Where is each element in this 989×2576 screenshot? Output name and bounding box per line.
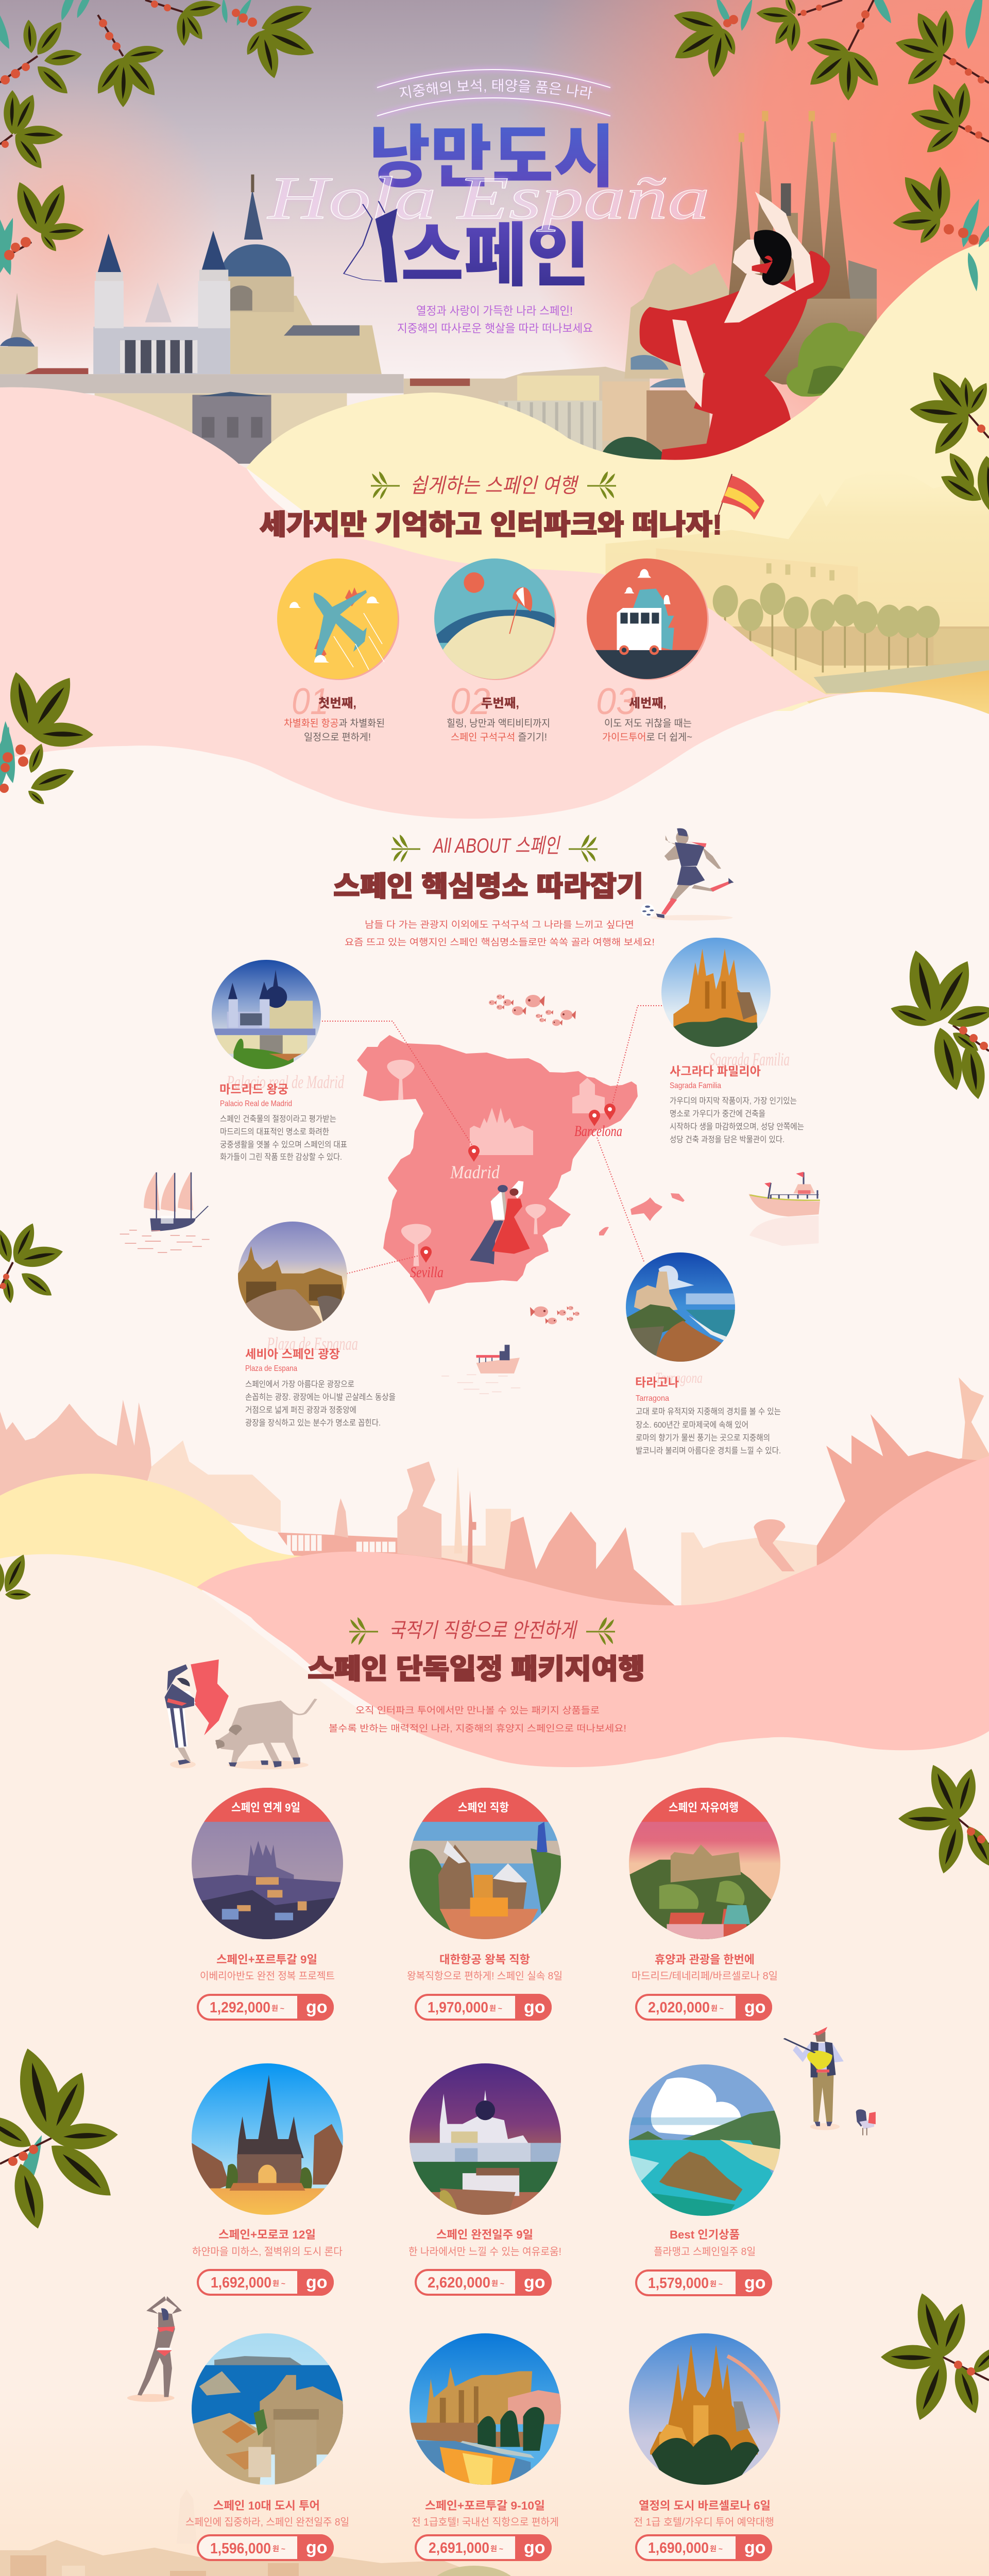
price button: 1,292,000 (210, 1999, 270, 2016)
description: 로마의 향기가 물씬 풍기는 곳으로 지중해의 (636, 1433, 770, 1443)
tour subtitle: 한 나라에서만 느낄 수 있는 여유로움! (408, 2246, 561, 2258)
hero tagline: 지중해의 보석, 태양을 품은 나라 (399, 78, 592, 100)
price button: 1,579,000 (648, 2275, 709, 2292)
step 2 caption: 스페인 구석구석 즐기기! (451, 732, 547, 743)
category label: 스페인 직항 (458, 1801, 509, 1814)
tour card 7 (185, 2333, 349, 2561)
tour card 3 (629, 1788, 780, 2021)
hero title line 1: 낭만도시 (369, 120, 615, 195)
lower right wave mask (773, 692, 989, 804)
price button (198, 2534, 334, 2561)
price button (636, 2269, 772, 2296)
hand-lettered heading with sprigs (371, 471, 616, 499)
price button: go (306, 1997, 328, 2017)
photo: Park Guell with label (410, 1788, 561, 1939)
illustration: dancing couple (470, 1181, 530, 1264)
price button: 2,620,000 (428, 2275, 490, 2291)
tour card 5 (408, 2063, 561, 2296)
section title: 세가지만 기억하고 인터파크와 떠나자! (260, 510, 722, 540)
photo: palace (212, 960, 321, 1069)
map landmark: tower (572, 1078, 605, 1113)
photo: coast (626, 1252, 735, 1362)
icon: Spanish flag (718, 474, 764, 520)
price button: 원 ~ (490, 2545, 503, 2553)
hero title line 2: 스페인 (401, 217, 590, 295)
hero sky gradient (0, 0, 989, 469)
icon: parasol (509, 587, 532, 634)
tour card 8 (410, 2333, 561, 2561)
illustration: soccer player (641, 828, 734, 921)
left foliage mid page (0, 2044, 121, 2232)
circle 3: guide bus (587, 558, 709, 680)
cream wave (246, 241, 989, 711)
place card: Tarragona (626, 1252, 781, 1455)
tour subtitle: 플라맹고 스페인일주 8일 (654, 2246, 756, 2258)
tour title: 스페인 완전일주 9일 (436, 2228, 533, 2241)
place name: 사그라다 파밀리아 (670, 1064, 761, 1078)
hero tagline arcs (377, 70, 610, 116)
section title: 스페인 단독일정 패키지여행 (308, 1654, 645, 1685)
tour card 9 (629, 2333, 780, 2561)
description: 명소로 가우디가 중간에 건축을 (670, 1109, 765, 1118)
price button (416, 2269, 552, 2296)
script label: Palacio real de Madrid (226, 1072, 345, 1092)
hero subtitle: 지중해의 따사로운 햇살을 따라 떠나보세요 (397, 322, 593, 335)
price button: 1,596,000 (210, 2540, 271, 2557)
lower-right foliage on cream (909, 366, 989, 513)
icon: airplane (289, 587, 384, 670)
yellow wave (0, 1473, 309, 1592)
step 2 caption: 힐링, 낭만과 액티비티까지 (447, 718, 550, 729)
price button (198, 1994, 334, 2021)
tour subtitle: 전 1급호텔! 국내선 직항으로 편하게 (412, 2516, 559, 2528)
tour title: 스페인+모로코 12일 (218, 2228, 316, 2241)
description: 스페인에서 가장 아름다운 광장으로 (245, 1380, 354, 1389)
section description: 요즘 뜨고 있는 여행지인 스페인 핵심명소들로만 쏙쏙 골라 여행해 보세요! (345, 937, 655, 947)
place name: 마드리드 왕궁 (219, 1082, 288, 1096)
price button: 2,020,000 (648, 1999, 710, 2016)
tour subtitle: 스페인에 집중하라, 스페인 완전일주 8일 (185, 2516, 349, 2528)
script overlay Hola Espana: Hola España (266, 164, 710, 232)
photo: Tossa de Mar (192, 2333, 343, 2485)
icon: bus (617, 608, 661, 655)
photo: pink sky hill castle with label (629, 1788, 780, 1939)
price button: go (524, 1997, 545, 2017)
tour title: 스페인+포르투갈 9일 (216, 1953, 317, 1966)
description: 마드리드의 대표적인 명소로 화려한 (220, 1127, 329, 1137)
price button: 원 ~ (711, 2004, 724, 2012)
price button: 원 ~ (272, 2279, 285, 2287)
left foliage at section change (0, 669, 93, 807)
description: 시작하다 생을 마감하였으며, 성당 안쪽에는 (670, 1122, 804, 1131)
price button: 원 ~ (710, 2280, 723, 2288)
map trees (387, 1060, 546, 1266)
description: 광장을 장식하고 있는 분수가 명소로 꼽힌다. (245, 1418, 381, 1428)
description (636, 1407, 781, 1455)
step 2 caption (447, 681, 550, 743)
description: 화가들이 그린 작품 또한 감상할 수 있다. (220, 1153, 342, 1162)
photo: Palma cathedral background (606, 468, 989, 714)
script label: Tarragona (655, 1369, 703, 1386)
illustration: swimmer (127, 2296, 182, 2402)
place name: 세비아 스페인 광장 (245, 1347, 340, 1361)
price button: 원 ~ (491, 2279, 504, 2287)
map of Spain (120, 1006, 820, 1394)
description: 성당 건축 과정을 담은 박물관이 있다. (670, 1135, 785, 1144)
English name: Sagrada Familia (670, 1081, 721, 1090)
section: all about Spain (0, 828, 989, 2576)
description: 발코니라 불리며 아름다운 경치를 느낄 수 있다. (636, 1446, 781, 1455)
tour subtitle: 하얀마을 미하스, 절벽위의 도시 론다 (192, 2246, 343, 2258)
section: package tours (165, 1617, 645, 1769)
price button: 1,692,000 (211, 2275, 271, 2291)
section title: 스페인 핵심명소 따라잡기 (333, 871, 643, 902)
category label: 스페인 연계 9일 (231, 1801, 300, 1814)
photo: Palma cathedral (410, 2333, 561, 2485)
tour card 6 (629, 2064, 780, 2296)
section: three things (260, 471, 764, 743)
top-left foliage (0, 0, 318, 277)
hero subtitle: 열정과 사랑이 가득한 나라 스페인! (416, 304, 573, 317)
small boat (441, 1345, 520, 1394)
step 1 caption: 첫번째, (318, 697, 356, 710)
tour card 2 (407, 1788, 562, 2021)
description: 가우디의 마지막 작품이자, 가장 인기있는 (670, 1096, 797, 1106)
script label: Plaza de Espanaa (266, 1333, 358, 1354)
tour subtitle: 왕복직항으로 편하게! 스페인 실속 8일 (407, 1970, 562, 1982)
illustration: matador and bull (165, 1659, 316, 1769)
right foliage beside Sagrada (888, 947, 989, 1101)
right foliage lower page (881, 2290, 989, 2425)
section description: 남들 다 가는 관광지 이외에도 구석구석 그 나라를 느끼고 싶다면 (365, 920, 634, 930)
leaf clusters: hero (0, 0, 989, 513)
city labels: Madrid (450, 1162, 500, 1182)
description: 장소. 600년간 로마제국에 속해 있어 (636, 1420, 748, 1430)
bottom town background (0, 2396, 989, 2576)
dotted connector lines (322, 1006, 662, 1274)
photo: Madrid cathedral (0, 175, 404, 464)
circle 1: flight (277, 558, 399, 680)
city labels: Barcelona (574, 1123, 622, 1140)
price button: go (744, 2273, 766, 2293)
price button: 원 ~ (489, 2004, 502, 2012)
description (220, 1114, 347, 1162)
hand-lettered heading with sprigs: All ABOUT 스페인 (432, 835, 560, 857)
left foliage beside Seville (0, 1220, 65, 1304)
description: 고대 로마 유적지와 지중해의 경치를 볼 수 있는 (636, 1407, 781, 1416)
place card: Sagrada Familia (661, 938, 804, 1144)
tour card 1 (192, 1788, 343, 2021)
place card: Madrid royal palace (212, 960, 347, 1162)
tour title: 스페인+포르투갈 9-10일 (425, 2499, 545, 2512)
step 3 caption: 이도 저도 귀찮을 때는 (604, 718, 692, 729)
city labels (410, 1123, 622, 1281)
description: 손꼽히는 광장. 광장에는 아니발 곤살레스 동상을 (245, 1393, 396, 1402)
section description (345, 920, 655, 947)
hand-lettered heading with sprigs: 국적기 직항으로 안전하게 (389, 1619, 578, 1642)
step 1 caption: 일정으로 편하게! (304, 732, 371, 743)
dancing couple silhouette (344, 201, 397, 282)
peach wave panel (197, 1456, 989, 1767)
step 2 caption: 두번째, (481, 697, 519, 710)
top-right foliage (669, 0, 989, 292)
price button (416, 1994, 552, 2021)
cream section background (0, 1554, 989, 2576)
price button: 원 ~ (710, 2545, 723, 2553)
photo: Madrid at night (410, 2063, 561, 2215)
hand-lettered heading with sprigs (391, 835, 598, 862)
step 2 caption: 02 (450, 681, 490, 722)
place name: 타라고나 (635, 1376, 679, 1389)
price button: go (524, 2273, 545, 2292)
step 1 caption (284, 681, 385, 743)
script label: Sagrada Familia (709, 1049, 790, 1070)
price button: go (524, 2538, 545, 2557)
photo: Barcelona cathedral (192, 2063, 343, 2215)
city labels: Sevilla (410, 1264, 444, 1281)
photo: plaza (238, 1222, 347, 1331)
fish group bottom (530, 1306, 579, 1324)
tour title: 스페인 10대 도시 투어 (213, 2499, 320, 2512)
category label: 스페인 자유여행 (669, 1801, 739, 1814)
photo: Barcelona dusk with label (192, 1788, 343, 1939)
price button: go (744, 2538, 766, 2557)
description (245, 1380, 396, 1428)
description: 스페인 건축물의 절정이라고 평가받는 (220, 1114, 336, 1124)
Balearic islands (599, 1193, 685, 1235)
tour title: 휴양과 관광을 한번에 (655, 1953, 755, 1966)
tour title: 대한항공 왕복 직항 (439, 1953, 530, 1966)
tour title: 열정의 도시 바르셀로나 6일 (639, 2499, 771, 2512)
step 3 caption: 03 (596, 681, 636, 722)
tour subtitle: 전 1급 호텔/가우디 투어 예약대행 (634, 2516, 774, 2528)
price button: go (306, 2538, 328, 2557)
price button: 원 ~ (271, 2004, 284, 2012)
sailing ship left (120, 1173, 210, 1252)
step 3 caption (596, 681, 692, 743)
price button (416, 2534, 552, 2561)
step 1 caption: 01 (292, 681, 329, 722)
tour subtitle: 이베리아반도 완전 정복 프로젝트 (200, 1970, 335, 1982)
photo: beach and rocks (629, 2064, 780, 2216)
map pins (420, 1104, 616, 1263)
price button: 1,970,000 (428, 1999, 488, 2016)
section description: 볼수록 반하는 매력적인 나라, 지중해의 휴양지 스페인으로 떠나보세요! (329, 1723, 626, 1734)
tour title: Best 인기상품 (670, 2228, 740, 2241)
price button: 1,690,000 (648, 2540, 709, 2556)
English name: Palacio Real de Madrid (220, 1099, 292, 1108)
hero heading group (247, 49, 722, 335)
description: 궁중생활을 엿볼 수 있으며 스페인의 대표 (220, 1140, 347, 1149)
illustration: guitarist (784, 2027, 876, 2136)
fish group top (489, 994, 576, 1026)
description: 거점으로 넓게 퍼진 광장과 정중앙에 (245, 1405, 356, 1415)
script overlay Hola Espana: Hola España (266, 164, 710, 232)
price button: 원 ~ (272, 2545, 285, 2553)
photo: basilica (661, 938, 771, 1047)
hero waves (246, 241, 989, 711)
price button: go (306, 2273, 328, 2292)
circle 2: beach (434, 558, 556, 680)
place card: Plaza de Espana (238, 1222, 396, 1428)
right foliage mid page (898, 1760, 989, 1876)
photo: Sagrada Familia (624, 111, 877, 397)
English name: Tarragona (636, 1394, 669, 1403)
illustration: bird (856, 2109, 876, 2136)
map landmark: royal palace (470, 1108, 533, 1155)
hand-lettered heading with sprigs: 쉽게하는 스페인 여행 (410, 474, 579, 497)
pink wave panel (0, 387, 871, 819)
photo: city rooftops (404, 367, 710, 464)
price button: 2,691,000 (429, 2540, 489, 2556)
hero subtitle (397, 304, 593, 335)
section description: 오직 인터파크 투어에서만 만나볼 수 있는 패키지 상품들로 (355, 1705, 600, 1716)
price button (636, 1994, 772, 2021)
step 3 caption: 가이드투어로 더 쉽게~ (602, 732, 692, 743)
ship right (748, 1172, 820, 1246)
price button: go (744, 1997, 766, 2017)
price button (636, 2534, 772, 2561)
left small foliage (0, 1551, 31, 1600)
tour card 4 (192, 2063, 343, 2296)
hero panel (0, 0, 989, 711)
description (670, 1096, 804, 1144)
hand-lettered heading with sprigs (349, 1617, 615, 1645)
skyline silhouettes (0, 1377, 989, 1612)
flamenco dancer (640, 192, 830, 460)
tour subtitle: 마드리드/테네리페/바르셀로나 8일 (632, 1970, 778, 1982)
section description (329, 1705, 626, 1734)
price button (198, 2269, 334, 2296)
step 3 caption: 세번째, (629, 697, 667, 710)
photo: Sagrada Familia rainbow (629, 2333, 780, 2485)
English name: Plaza de Espana (245, 1364, 297, 1373)
step 1 caption: 차별화된 항공과 차별화된 (284, 718, 385, 729)
